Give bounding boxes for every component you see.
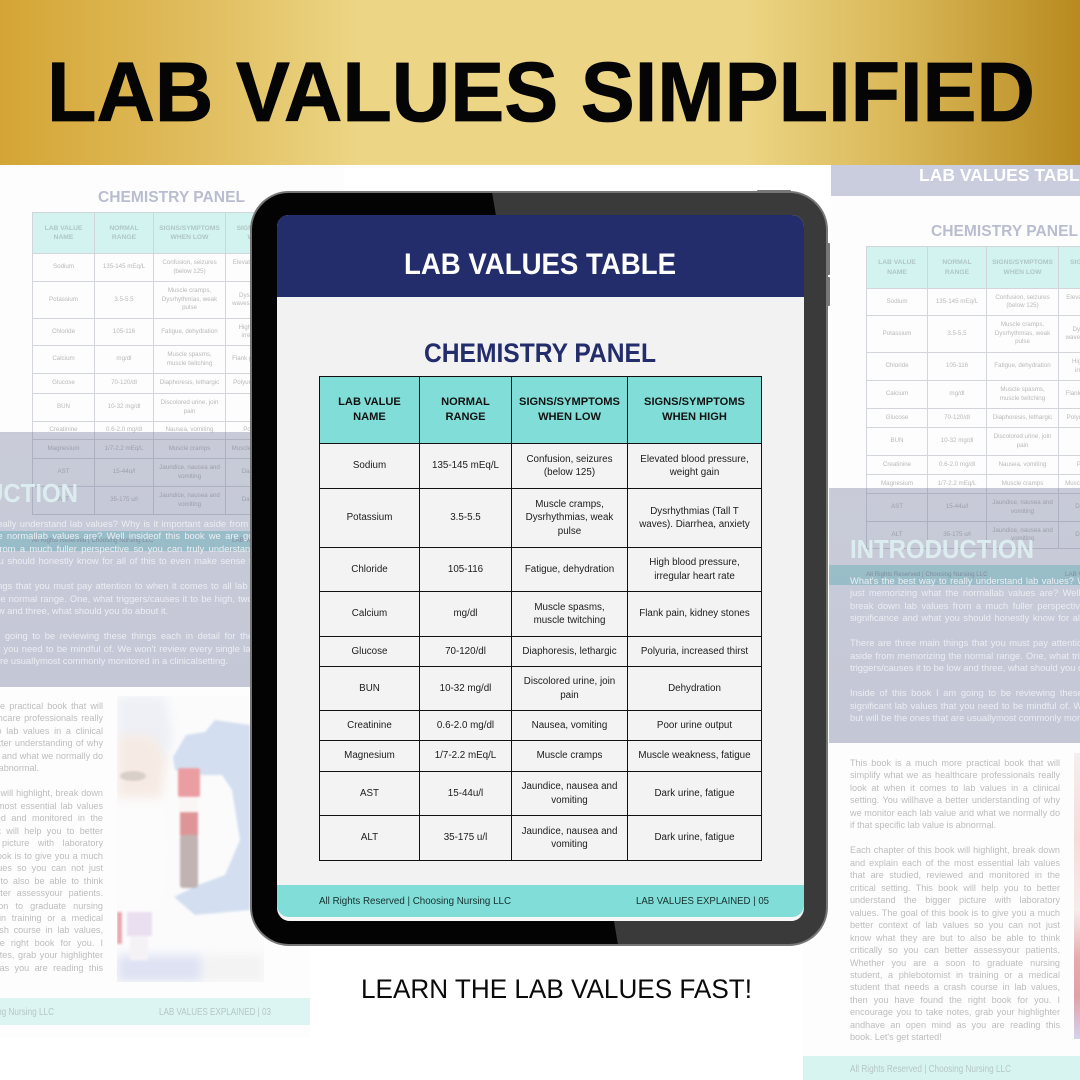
table: right ghost chemistry panel: NORMAL [942,259,972,266]
photo: right page cropped edge [1074,753,1080,1039]
table: left ghost chemistry panel: Muscle cramps, [168,287,211,294]
text block: right book description [850,758,1060,1042]
table: left ghost chemistry panel: Potassium [49,296,78,303]
table: chemistry panel lab values: Discolored urine, join [524,676,615,687]
heading: left page chemistry panel: CHEMISTRY PANEL [98,189,245,206]
table: left ghost chemistry panel: vomiting [178,472,201,480]
table: chemistry panel lab values: NORMAL [441,396,490,408]
table: right ghost chemistry panel: Confusion, seizures [995,294,1050,301]
text block: left book description [0,701,103,973]
table: left ghost chemistry panel: Dark urine, fatigue [242,468,292,475]
table: left ghost chemistry panel: Diaphoresis, lethargic [160,379,219,386]
table: chemistry panel lab values: Dysrhythmias, weak [526,512,613,523]
table: chemistry panel lab values: 15-44u/l [448,788,483,799]
table: chemistry panel lab values: Polyuria, increased thirst [641,646,748,657]
table: chemistry panel lab values: 135-145 mEq/L [432,460,499,471]
table: right ghost chemistry panel: Glucose [886,414,908,421]
table: right ghost chemistry panel: SIGNS/SYMPTOMS [992,259,1053,266]
table: left ghost chemistry panel: 105-116 [113,328,135,335]
table: right ghost chemistry panel: (below 125) [1006,302,1039,309]
panel: faint lower left page background [0,687,310,1037]
table: left ghost chemistry panel: (below 125) [173,268,206,274]
text block: right book description: that are studied, reviewed and monitored in the [850,870,1060,880]
table: left ghost chemistry panel: SIGNS/SYMPTOMS [237,225,297,232]
table: chemistry panel lab values: WHEN HIGH [662,411,727,423]
table: left ghost chemistry panel: Creatinine [49,426,78,433]
table: right ghost chemistry panel: pain [1017,442,1028,448]
table: chemistry panel lab values: 1/7-2.2 mEq/L [435,750,496,761]
title: lab values simplified: LAB VALUES SIMPLIFIED [47,45,1035,139]
caption: learn the lab values fast: LEARN THE LAB VALUES FAST! [361,974,752,1004]
table: left ghost chemistry panel: Poor urine output [243,426,291,433]
table: chemistry panel lab values: Dehydration [668,683,721,694]
table: chemistry panel lab values: 0.6-2.0 mg/dl [437,720,494,731]
header band: right page [831,165,1080,196]
table: right ghost chemistry panel: 0.6-2.0 mg/dl [939,461,975,468]
table: chemistry panel lab values: Magnesium [344,750,395,761]
table: chemistry panel lab values: Muscle cramps [537,750,602,761]
table: right ghost chemistry panel: NAME [887,268,907,276]
table: right ghost chemistry panel: Muscle cramps [1002,480,1043,487]
table: chemistry panel lab values: NAME [353,411,386,423]
table: chemistry panel lab values: BUN [359,683,380,694]
table: left ghost chemistry panel: Dysrhythmias (Tall T [239,292,295,299]
text block: right book description: encourage you to take notes, grab your highlighter [850,1007,1060,1017]
table: left ghost chemistry panel: mg/dl [116,355,132,362]
table: right ghost chemistry panel: ALT [892,531,902,538]
table: chemistry panel lab values: (below 125) [544,467,595,478]
table: right ghost chemistry panel: LAB VALUE [878,259,916,266]
table: left ghost chemistry panel: Chloride [52,328,75,335]
text block: right book description: if that specific lab value is abnormal. [850,820,996,830]
text block: right book description: Each chapter of this book will highlight, break down [850,845,1060,855]
footer band: screen [277,885,804,917]
table: chemistry panel lab values: Confusion, seizures [526,454,613,464]
table: right ghost chemistry panel: 35-175 u/l [943,531,971,538]
table: right ghost chemistry panel: RANGE [945,268,969,276]
table: left ghost chemistry panel: Elevated blood pressure, [233,259,301,266]
text block: right book description: understand the bigger picture with laboratory [850,895,1060,905]
text block: right book description: we monitor each lab value and what we normally do [850,808,1060,818]
table: right ghost chemistry panel: Chloride [885,362,909,369]
table: left ghost chemistry panel: High blood pressure, [238,324,296,331]
table: left ghost chemistry panel: pulse [182,304,197,311]
table: chemistry panel lab values: AST [360,788,379,799]
footer text: right table page [866,571,1080,578]
table: right ghost chemistry panel: Jaundice, nausea and [992,527,1053,534]
bottom sliver: screen [277,917,804,921]
table: right ghost chemistry panel: AST [891,503,903,510]
table: chemistry panel lab values: Dysrhythmias (Tall T [650,506,739,516]
table: left ghost chemistry panel: Fatigue, dehydration [161,328,218,335]
table: right ghost chemistry panel: BUN [890,437,904,444]
table: chemistry panel lab values: ALT [361,832,378,843]
table: left ghost chemistry panel: Nausea, vomiting [166,426,213,433]
panel: faint left page background [0,165,344,435]
text block: right book description: simplify what we as healthcare professionals really [850,770,1060,780]
table: chemistry panel lab values: 105-116 [448,564,483,575]
panel: faint right page background [831,196,1080,496]
table: left ghost chemistry panel: RANGE [112,234,136,241]
table: chemistry panel lab values [319,376,762,861]
table: right ghost chemistry panel: mg/dl [949,390,965,397]
table: chemistry panel lab values: Creatinine [347,720,392,731]
table: chemistry panel lab values: 35-175 u/l [444,832,487,843]
table: left ghost chemistry panel: BUN [57,403,70,410]
table: right ghost chemistry panel: Magnesium [881,480,913,487]
table: left ghost chemistry panel: 135-145 mEq/L [103,263,145,270]
table: chemistry panel lab values: pulse [558,526,581,537]
photo: gloved hand holding blood test tube [117,696,260,982]
table: chemistry panel lab values: Diaphoresis, lethargic [522,646,617,657]
table: right ghost chemistry panel: pulse [1015,338,1030,345]
table: right ghost chemistry panel: vomiting [1011,535,1034,542]
table: left ghost chemistry panel: NAME [54,234,73,241]
text block: right book description: look at when it comes to lab values in a clinical [850,783,1060,793]
table: chemistry panel lab values: Dark urine, fatigue [654,832,735,843]
text block: right book description: then you have found the right book for you. I [850,995,1060,1005]
text block: right book description: critical setting. This book will help you to better [850,883,1060,893]
table: left ghost chemistry panel: Calcium [52,355,75,362]
table: chemistry panel lab values: Poor urine output [657,720,732,731]
table: right ghost chemistry panel: vomiting [1011,508,1034,514]
table: right ghost chemistry panel: Muscle spasms, [1000,386,1045,393]
text block: right book description: student, a phlebotomist in training or a medical [850,970,1060,980]
table: left ghost chemistry panel: Jaundice, nausea and [159,492,220,499]
table: right ghost chemistry panel: 15-44u/l [946,503,968,510]
table: chemistry panel lab values: Dark urine, fatigue [654,788,735,799]
panel: right introduction band [829,488,1080,743]
table: chemistry panel lab values: 10-32 mg/dl [440,683,491,694]
table: right ghost chemistry panel: Fatigue, dehydration [994,362,1051,369]
table: chemistry panel lab values: irregular heart rate [654,570,735,582]
text block: right book description: Whether you are a soon to graduate nursing [850,958,1060,968]
table: chemistry panel lab values: Fatigue, dehydration [525,564,614,575]
table: left ghost chemistry panel: 70-120/dl [111,379,137,386]
table: right ghost chemistry panel: 10-32 mg/dl [941,437,973,444]
table: left ghost chemistry panel: Muscle spasms, [167,351,212,358]
table: right ghost chemistry panel: WHEN LOW [1004,268,1041,276]
panel: left introduction band [0,432,310,687]
table: left ghost chemistry panel: 15-44u/l [113,468,135,475]
table: chemistry panel lab values: Elevated blood pressure, [640,454,749,464]
table: chemistry panel lab values: WHEN LOW [538,411,601,423]
table: right ghost chemistry panel: Nausea, vomiting [999,461,1046,468]
table: chemistry panel lab values: LAB VALUE [338,396,401,408]
table: left ghost chemistry panel: ALT [58,496,69,503]
table: left ghost chemistry panel: 35-175 u/l [110,496,138,503]
table: chemistry panel lab values: Flank pain, kidney stones [639,608,750,619]
table: right ghost chemistry panel: Creatinine [883,461,911,468]
table: left ghost chemistry panel: SIGNS/SYMPTOMS [159,225,220,232]
table: left ghost chemistry panel: 10-32 mg/dl [108,403,140,410]
table: chemistry panel lab values: 70-120/dl [445,646,486,657]
table: left ghost chemistry panel: irregular heart rate [242,332,292,339]
table: chemistry panel lab values: Calcium [352,608,387,619]
text block: right introduction [850,576,1080,723]
text block: right book description: This book is a much more practical book that will [850,758,1060,768]
text block: right book description: better context of lab values so you can not just [850,920,1060,930]
banner: gold header [0,0,1080,165]
table: chemistry panel lab values: Glucose [352,646,387,657]
table: left ghost chemistry panel: WHEN LOW [171,234,208,241]
table: chemistry panel lab values: Jaundice, nausea and [522,826,617,836]
table: left ghost chemistry panel: waves). Diarrhea, anxiety [232,300,302,307]
table: left ghost chemistry panel: 3.5-5.5 [114,296,134,303]
table: right ghost chemistry panel: Muscle cramps, [1001,321,1044,328]
table: left ghost chemistry panel: Confusion, seizures [162,259,217,266]
text block: right book description: critically so you can better assessyour patients. [850,945,1060,955]
table: chemistry panel lab values: Muscle spasms, [534,602,605,612]
table: chemistry panel lab values: weight gain [670,467,719,478]
footer text: left table page [32,537,306,544]
table: left ghost chemistry panel: Glucose [52,379,75,386]
table: chemistry panel lab values: Muscle cramps, [535,499,604,510]
table: left ghost chemistry panel: Muscle weakness, fatigue [232,445,302,452]
footer text: left table page: All Rights Reserved | Choosing Nursing LLC [32,537,154,544]
footer text: right table page: All Rights Reserved | Choosing Nursing LLC [866,571,988,578]
table: chemistry panel lab values: Jaundice, nausea and [522,781,617,792]
heading: right page chemistry panel: CHEMISTRY PANEL [931,223,1078,240]
table: chemistry panel lab values: Chloride [351,564,388,575]
table: chemistry panel lab values: vomiting [551,839,588,850]
table: chemistry panel lab values: RANGE [445,411,486,423]
table: right ghost chemistry panel: 70-120/dl [944,414,970,421]
table: right ghost chemistry panel [866,246,1080,549]
table: right ghost chemistry panel: Discolored urine, join [994,433,1051,440]
table: right ghost chemistry panel: Diaphoresis, lethargic [993,414,1052,421]
table: right ghost chemistry panel: 3.5-5.5 [947,330,967,337]
table: chemistry panel lab values: vomiting [551,794,588,806]
table: left ghost chemistry panel: Dehydration [250,403,284,410]
text block: right book description: setting. You willhave a better understanding of why [850,795,1060,805]
table: left ghost chemistry panel: Muscle cramps [169,445,210,452]
table: left ghost chemistry panel: LAB VALUE [45,225,82,232]
header band: lab values table [277,215,804,297]
table: chemistry panel lab values: High blood pressure, [649,557,740,568]
table: right ghost chemistry panel: 135-145 mEq/L [936,298,978,305]
table: chemistry panel lab values: SIGNS/SYMPTOMS [519,396,620,408]
table: right ghost chemistry panel: Calcium [886,390,908,397]
text block: right book description: book. Let's get started! [850,1032,942,1042]
text block: left introduction [0,519,278,666]
table: left ghost chemistry panel: 1/7-2.2 mEq/L [105,445,143,452]
text block: right book description: values. The goal of this book is to give you a much [850,908,1060,918]
table: left ghost chemistry panel: Sodium [53,263,74,270]
table: right ghost chemistry panel: Potassium [883,330,911,337]
table: right ghost chemistry panel: 105-116 [946,362,968,369]
table: right ghost chemistry panel: Sodium [886,298,907,305]
panel: tablet screen [277,215,804,921]
table: left ghost chemistry panel: Jaundice, nausea and [159,464,220,471]
footer band: lower right page [803,1056,1080,1080]
table: left ghost chemistry panel: AST [57,468,70,475]
table: right ghost chemistry panel: muscle twitching [1000,394,1045,402]
footer band: right table page [829,565,1080,585]
table: chemistry panel lab values: muscle twitching [534,615,605,626]
table: left ghost chemistry panel: Dysrhythmias, weak [162,296,217,303]
text block: right book description: student that needs a crash course in lab values, [850,982,1060,992]
footer band: lower left page [0,998,310,1025]
table: left ghost chemistry panel: Flank pain, kidney stones [232,355,302,362]
table: left ghost chemistry panel: 0.6-2.0 mg/dl [106,426,142,433]
table: chemistry panel lab values: Nausea, vomiting [532,720,607,731]
icon: tablet device frame [250,190,830,946]
table: left ghost chemistry panel: Dark urine, fatigue [242,496,292,503]
table: left ghost chemistry panel: vomiting [178,500,201,508]
table: chemistry panel lab values: Sodium [353,460,386,471]
table: left ghost chemistry panel: WHEN HIGH [247,234,286,241]
table: left ghost chemistry panel: Polyuria, increased thirst [233,379,301,386]
table: chemistry panel lab values: waves). Diarrhea, anxiety [639,519,750,530]
text block: right book description: andhave an open mind as you are reading this [850,1020,1060,1030]
footer band: left table page [0,531,310,551]
table: chemistry panel lab values: mg/dl [454,608,477,619]
table: chemistry panel lab values: Muscle weakness, fatigue [638,750,751,761]
table: left ghost chemistry panel [32,212,302,515]
table: left ghost chemistry panel: NORMAL [109,225,139,232]
table: chemistry panel lab values: SIGNS/SYMPTOMS [644,396,745,408]
footer text: lower left page [0,1007,271,1018]
table: right ghost chemistry panel: Dysrhythmias, weak [995,330,1050,337]
table: chemistry panel lab values: pain [560,690,579,700]
table: left ghost chemistry panel: weight gain [251,268,283,274]
footer text: left table page: LAB VALUES EXPLAINED [232,537,306,544]
text block: right book description: and explain each of the most essential lab values [850,858,1060,868]
panel: faint lower right page background [803,743,1080,1080]
table: right ghost chemistry panel: Jaundice, nausea and [992,499,1053,506]
table: left ghost chemistry panel: muscle twitching [167,360,212,366]
table: left ghost chemistry panel: Magnesium [48,445,79,452]
footer text: lower left page: LAB VALUES EXPLAINED | 03 [159,1007,271,1018]
table: left ghost chemistry panel: pain [184,408,195,414]
table: chemistry panel lab values: Potassium [347,512,392,523]
table: chemistry panel lab values: 3.5-5.5 [450,512,481,523]
table: right ghost chemistry panel: 1/7-2.2 mEq/L [938,480,976,487]
table: left ghost chemistry panel: Discolored urine, join [161,399,218,406]
